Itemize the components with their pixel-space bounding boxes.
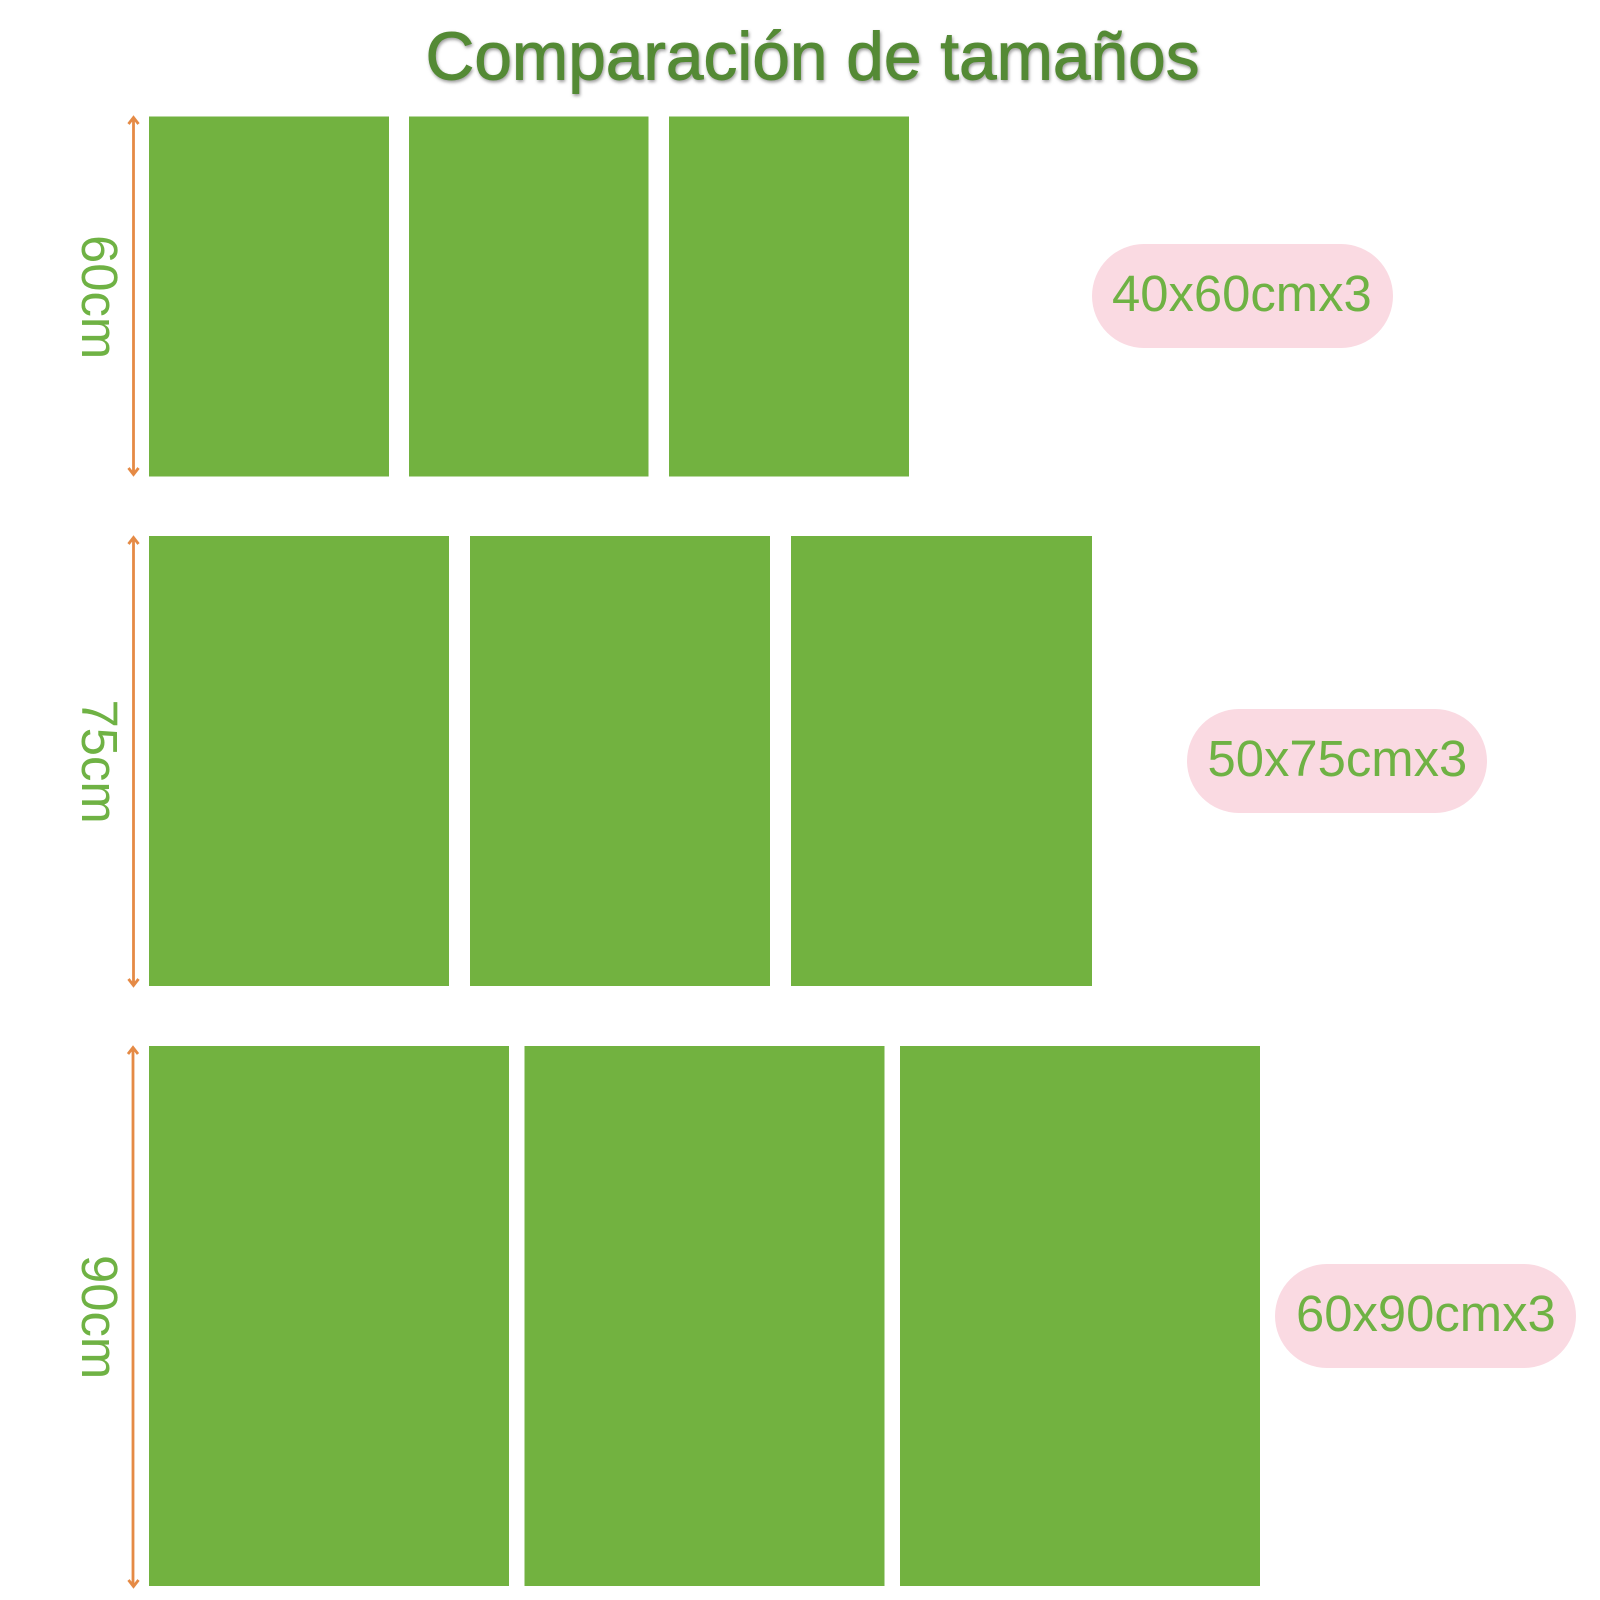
title: Comparación de tamaños: [426, 20, 1200, 94]
panels: three 50x75: [149, 536, 1092, 986]
row: 50x75cm: [71, 536, 1487, 986]
panels: three 40x60: [149, 116, 909, 476]
size pill: 50x75cmx3: [1187, 709, 1487, 813]
row: 60x90cm: [71, 1046, 1576, 1586]
row: 40x60cm: [71, 116, 1393, 476]
height label: 75cm: 75cm: [71, 700, 128, 824]
height arrow: 90cm: [128, 1048, 138, 1586]
size pill: 60x90cmx3: 60x90cmx3: [1296, 1285, 1556, 1342]
size pill: 40x60cmx3: 40x60cmx3: [1112, 265, 1372, 322]
size pill: 60x90cmx3: [1275, 1264, 1576, 1368]
size pill: 40x60cmx3: [1092, 244, 1393, 348]
size pill: 50x75cmx3: 50x75cmx3: [1208, 730, 1467, 787]
height arrow: 75cm: [128, 538, 138, 986]
height arrow: 60cm: [128, 118, 138, 474]
panels: three 60x90: [149, 1046, 1260, 1586]
height label: 90cm: 90cm: [71, 1255, 128, 1379]
height label: 60cm: 60cm: [71, 235, 128, 359]
